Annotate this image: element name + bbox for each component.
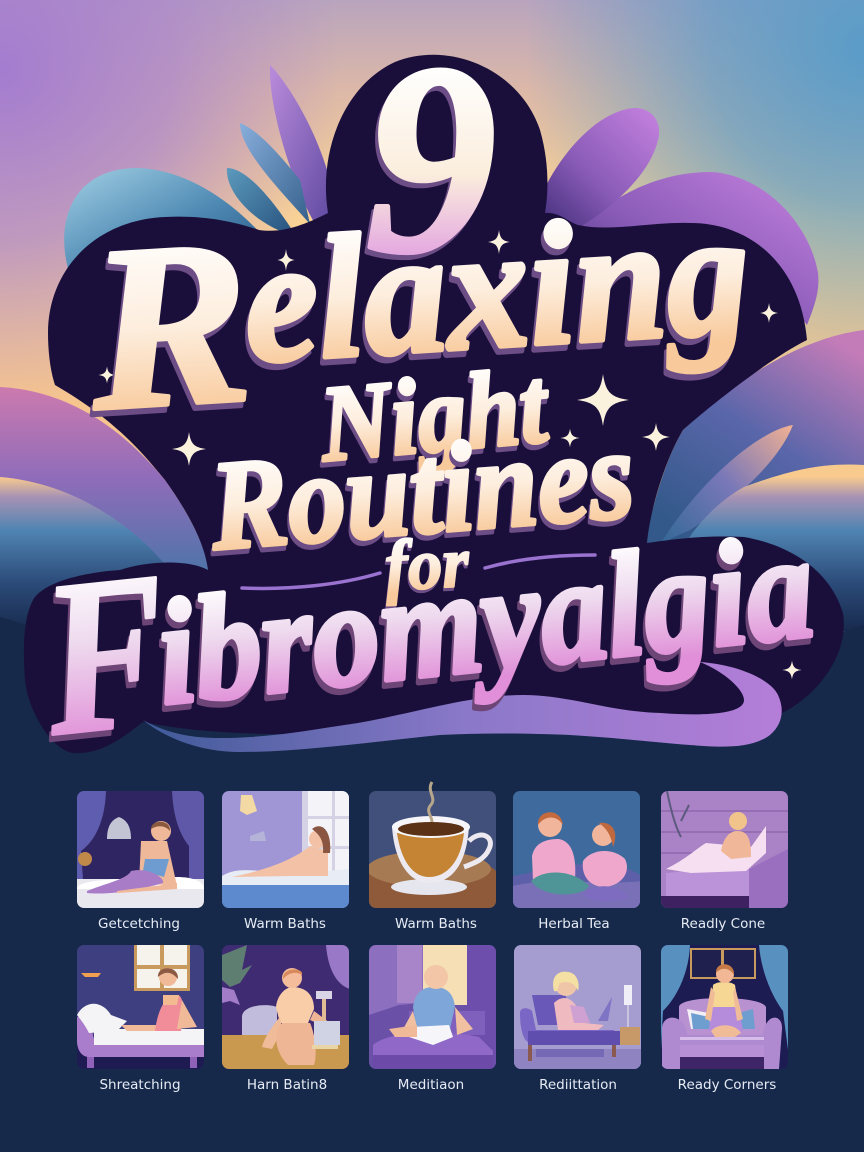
title: Fibromyalgia: F xyxy=(31,526,179,783)
card 1: stretching on bed xyxy=(77,791,204,908)
wave hills right xyxy=(640,330,864,640)
background sky xyxy=(0,0,864,650)
divider strokes beside for xyxy=(242,555,595,588)
steam xyxy=(429,782,433,822)
label: Harn Batin8: Harn Batin8 xyxy=(247,1077,327,1093)
title: 9: 9 xyxy=(366,8,496,309)
title: Fibromyalgia xyxy=(28,458,825,790)
wave hills left xyxy=(0,387,212,650)
card 10: sofa with curtains xyxy=(661,945,788,1069)
label: Rediittation: Rediittation xyxy=(539,1077,617,1093)
title: Relaxing: elaxing xyxy=(239,175,754,401)
title: Night: Night xyxy=(315,346,554,485)
card 9: reading on sofa xyxy=(514,945,642,1069)
title: 9: 9 xyxy=(363,13,493,314)
purple swoosh xyxy=(143,662,782,752)
title: Routines: Routines xyxy=(204,402,639,577)
card 8: meditation xyxy=(369,945,496,1069)
title: Relaxing: elaxing xyxy=(236,181,752,407)
label: Meditiaon: Meditiaon xyxy=(398,1077,464,1093)
card 4: two women talking xyxy=(513,791,642,908)
title: Night: Night xyxy=(313,351,552,490)
label: Readly Cone: Readly Cone xyxy=(681,916,765,932)
title: for: for xyxy=(382,525,471,609)
card 5: lavender bed xyxy=(661,791,788,908)
title: Relaxing: R xyxy=(81,191,258,461)
title: Routines: Routines xyxy=(203,407,637,582)
label: Warm Baths 2: Warm Baths xyxy=(395,916,477,932)
label: Shreatching: Shreatching xyxy=(99,1077,181,1093)
title: for: for xyxy=(383,522,472,606)
card 7: seated figure xyxy=(222,945,350,1069)
label: Getcetching: Getcetching xyxy=(98,916,180,932)
card 2: warm bath xyxy=(222,791,350,908)
label: Ready Corners: Ready Corners xyxy=(678,1077,776,1093)
dark title blob xyxy=(24,55,844,753)
navy base xyxy=(0,617,864,1152)
card 6: stretching on chaise xyxy=(77,945,204,1069)
title: Fibromyalgia: F xyxy=(29,532,177,790)
card 3: tea cup xyxy=(369,781,496,908)
stars xyxy=(98,230,802,680)
decorative leaves xyxy=(64,65,818,325)
title: Relaxing xyxy=(78,160,758,467)
label: Warm Baths: Warm Baths xyxy=(244,916,326,932)
label: Herbal Tea: Herbal Tea xyxy=(538,916,610,932)
title: Relaxing: R xyxy=(78,197,255,467)
